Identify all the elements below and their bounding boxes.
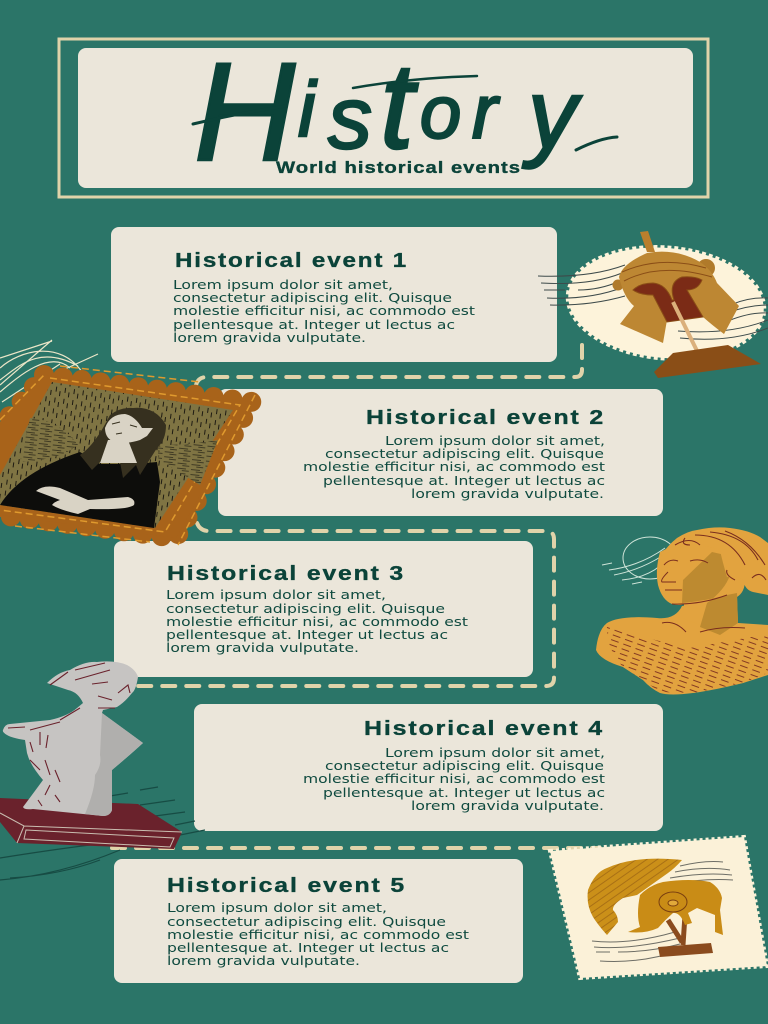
statue shadow <box>85 713 143 816</box>
face shadow <box>682 552 738 635</box>
face features <box>662 560 745 632</box>
title: y <box>522 59 582 169</box>
hair <box>660 527 768 595</box>
body text: Lorem ipsum dolor sit amet, <box>385 745 605 760</box>
body text: Lorem ipsum dolor sit amet, <box>166 587 386 602</box>
title flourishes <box>193 76 617 150</box>
icon: classical bust <box>596 527 768 694</box>
card <box>114 859 523 983</box>
body text: Lorem ipsum dolor sit amet, <box>385 433 605 448</box>
frame gilding <box>0 366 255 545</box>
card <box>194 704 663 831</box>
icon: crested helmet stamp <box>550 837 767 978</box>
body text: consectetur adipiscing elit. Quisque <box>325 446 604 461</box>
body text: pellentesque at. Integer ut lectus ac <box>173 317 455 332</box>
body text: consectetur adipiscing elit. Quisque <box>166 601 445 616</box>
panel: event 2 <box>218 389 663 516</box>
postmark lines <box>0 340 98 402</box>
title frame <box>59 39 708 197</box>
postmark lines <box>602 537 677 584</box>
base <box>0 798 182 849</box>
base top <box>0 798 182 849</box>
dress <box>0 452 160 528</box>
panel: event 3 <box>114 541 533 677</box>
body text: consectetur adipiscing elit. Quisque <box>167 914 446 929</box>
body text: molestie efficitur nisi, ac commodo est <box>173 303 475 318</box>
stamp edge <box>550 837 767 978</box>
subtitle: World historical events <box>276 159 521 177</box>
panel: event 4 <box>194 704 663 831</box>
body text <box>173 277 475 345</box>
heading: Historical event 4 <box>364 718 604 740</box>
body text: Lorem ipsum dolor sit amet, <box>173 277 393 292</box>
card <box>111 227 557 362</box>
title: H <box>194 33 296 190</box>
dashed connector 2 <box>136 523 554 686</box>
body text <box>303 433 605 501</box>
body text: molestie efficitur nisi, ac commodo est <box>166 614 468 629</box>
panel: event 1 <box>111 227 557 362</box>
neck <box>100 440 137 463</box>
body text: pellentesque at. Integer ut lectus ac <box>323 473 605 488</box>
card <box>218 389 663 516</box>
plume stub <box>640 231 655 252</box>
frame scallops <box>0 375 252 538</box>
stand base <box>658 943 713 957</box>
helmet boss centre <box>668 900 678 906</box>
body text: pellentesque at. Integer ut lectus ac <box>166 627 448 642</box>
title: o <box>420 71 461 154</box>
body text: lorem gravida vulputate. <box>411 486 604 501</box>
title card <box>78 48 693 188</box>
title: t <box>380 38 419 174</box>
heading: Historical event 3 <box>167 563 405 585</box>
helmet <box>628 880 723 935</box>
dashed connector 1 <box>196 345 582 385</box>
base trim <box>0 813 182 847</box>
frame fill <box>0 375 252 538</box>
title: i <box>298 65 318 153</box>
body text: lorem gravida vulputate. <box>167 953 360 968</box>
body text: Lorem ipsum dolor sit amet, <box>167 900 387 915</box>
plume <box>588 859 682 935</box>
body text: lorem gravida vulputate. <box>411 798 604 813</box>
hair curls <box>675 531 766 580</box>
ear discs <box>612 259 715 290</box>
body text: pellentesque at. Integer ut lectus ac <box>323 785 605 800</box>
body text: molestie efficitur nisi, ac commodo est <box>303 459 605 474</box>
icon: marble statue <box>0 661 205 880</box>
stamp <box>564 240 768 366</box>
statue body <box>3 661 143 816</box>
icon: portrait painting <box>0 340 255 545</box>
card <box>114 541 533 677</box>
arms <box>36 487 134 514</box>
landscape right <box>158 440 218 485</box>
chisel marks <box>8 663 130 806</box>
stand base <box>654 345 761 378</box>
body text <box>167 900 469 968</box>
body text: lorem gravida vulputate. <box>173 330 366 345</box>
heading: Historical event 1 <box>175 250 408 272</box>
head and neck <box>657 542 745 625</box>
panel: event 5 <box>114 859 523 983</box>
title: r <box>472 70 500 155</box>
postmark lines <box>538 265 768 339</box>
helmet boss <box>659 892 687 912</box>
helmet shell <box>619 252 739 343</box>
title: s <box>328 68 372 167</box>
landscape left <box>20 418 78 462</box>
body text: molestie efficitur nisi, ac commodo est <box>303 771 605 786</box>
helmet band <box>622 262 712 281</box>
heading: Historical event 5 <box>167 875 406 897</box>
helmet interior <box>633 277 703 322</box>
shoulders <box>596 598 768 694</box>
icon: roman helmet on stamp <box>538 231 768 378</box>
postmark lines <box>592 862 733 962</box>
face features <box>112 422 137 434</box>
dashed connector 3 <box>112 846 600 850</box>
body text: lorem gravida vulputate. <box>166 640 359 655</box>
drapery <box>607 626 768 693</box>
body text: consectetur adipiscing elit. Quisque <box>325 758 604 773</box>
body text <box>166 587 468 655</box>
title panel <box>78 33 693 190</box>
postmark lines <box>0 787 205 880</box>
hair <box>80 408 166 478</box>
body text: molestie efficitur nisi, ac commodo est <box>167 927 469 942</box>
face <box>105 414 153 443</box>
stand <box>668 915 685 945</box>
body text <box>303 745 605 813</box>
heading: Historical event 2 <box>366 407 605 429</box>
body text: pellentesque at. Integer ut lectus ac <box>167 940 449 955</box>
stand pole <box>673 302 700 357</box>
painting background <box>0 382 233 528</box>
body text: consectetur adipiscing elit. Quisque <box>173 290 452 305</box>
